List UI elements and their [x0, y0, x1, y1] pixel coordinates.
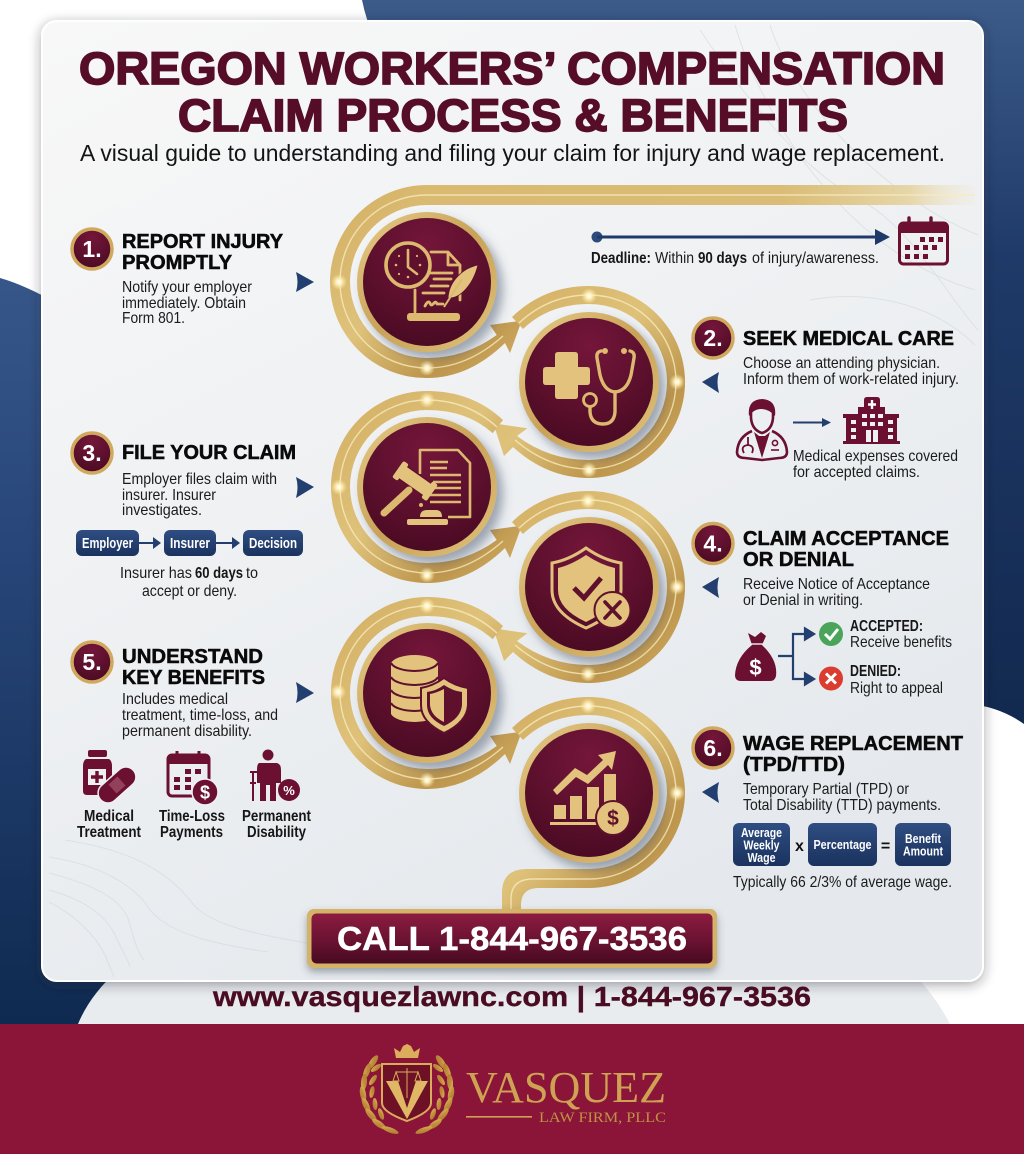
icon: permanent disability person: %: [283, 783, 295, 798]
60 day note: to: [246, 565, 258, 582]
badge 6: 6.: [703, 735, 723, 761]
icon: calendar deadline: [900, 218, 948, 264]
icon: accepted check: [819, 622, 843, 646]
logo wreath: [359, 1054, 455, 1136]
description 2: Choose an attending physician.: [743, 355, 940, 372]
60 day note: [120, 565, 258, 600]
decision branch arrows: [778, 628, 814, 684]
label: medical treatment: Medical: [84, 808, 134, 825]
badge 4: 4.: [703, 530, 723, 556]
arrow: doctor to hospital: [793, 418, 831, 427]
title: OREGON WORKERS’ COMPENSATION: [79, 43, 945, 94]
description 6: [743, 781, 941, 814]
heading 1: [122, 230, 283, 274]
description 3: Employer files claim with: [122, 471, 277, 488]
pointer arrow 1: [296, 272, 314, 292]
heading 2: SEEK MEDICAL CARE: [743, 327, 954, 350]
logo wordmark: VASQUEZ: [466, 1063, 666, 1112]
heading 1: PROMPTLY: [122, 251, 232, 274]
badge 3: 3.: [82, 440, 102, 466]
badge 4: [693, 524, 733, 564]
60 day note: accept or deny.: [142, 583, 237, 600]
accepted text: ACCEPTED:: [850, 618, 923, 635]
heading 5: [122, 645, 265, 689]
logo subline: LAW FIRM, PLLC: [539, 1110, 666, 1126]
step 5: understand key benefits: [72, 642, 278, 740]
box: average weekly wage: Average: [741, 825, 782, 840]
label: medical treatment: Treatment: [77, 824, 142, 841]
description 3: insurer. Insurer: [122, 487, 217, 504]
description 3: investigates.: [122, 502, 202, 519]
ribbon 3: loop and arrow: [331, 391, 522, 583]
medical expenses note: for accepted claims.: [793, 464, 920, 481]
pointer arrow 4: [702, 577, 719, 598]
medallion 5: coin stack and shield: [357, 623, 497, 763]
arrow: employer to insurer: [139, 537, 161, 549]
description 6: Temporary Partial (TPD) or: [743, 781, 910, 798]
icon: money bag: $: [749, 655, 762, 680]
typical rate note: Typically 66 2/3% of average wage.: [733, 874, 952, 891]
60 day note: Insurer has: [120, 565, 192, 582]
medallion 4: shield with check and x: [519, 517, 659, 657]
badge 5: 5.: [82, 649, 102, 675]
box: employer: [76, 530, 139, 556]
heading 6: (TPD/TTD): [743, 753, 845, 776]
box: insurer: [164, 530, 216, 556]
label: time-loss payments: Time-Loss: [159, 808, 225, 825]
heading 4: [743, 527, 949, 571]
main card: [42, 21, 983, 981]
box: average weekly wage: [733, 823, 790, 866]
heading 5: UNDERSTAND: [122, 645, 263, 668]
step 1: report injury: [72, 229, 283, 327]
gold ribbon path: [330, 185, 975, 913]
step 3: file your claim: [72, 433, 296, 519]
heading 4: OR DENIAL: [743, 548, 854, 571]
denied text: DENIED:: [850, 663, 901, 680]
description 5: Includes medical: [122, 691, 228, 708]
badge 2: 2.: [703, 325, 723, 351]
ribbon 6: loop leading to call button: [502, 697, 685, 913]
icon: medical treatment: [83, 750, 140, 807]
step 6: wage replacement: [693, 728, 963, 814]
heading 5: KEY BENEFITS: [122, 666, 265, 689]
description 4: [743, 576, 930, 609]
call to action button: [307, 909, 717, 968]
website and phone line: www.vasquezlawnc.com | 1-844-967-3536: [212, 981, 811, 1012]
description 5: permanent disability.: [122, 723, 252, 740]
medallion 2: medical cross and stethoscope: [519, 312, 659, 452]
box: benefit amount: Benefit: [905, 831, 942, 846]
description 5: [122, 691, 278, 740]
label: time-loss payments: Payments: [160, 824, 223, 841]
label: permanent disability: Permanent: [242, 808, 312, 825]
sparkles: [330, 274, 685, 801]
step 2: seek medical care: [693, 318, 959, 388]
call to action button: CALL 1-844-967-3536: [337, 920, 687, 957]
claim flow diagram: [76, 530, 303, 556]
wage formula: [733, 823, 951, 866]
equals sign: =: [881, 838, 890, 855]
title: CLAIM PROCESS & BENEFITS: [178, 90, 848, 141]
logo shield: [382, 1064, 431, 1121]
footer band: [0, 1024, 1024, 1154]
deadline timeline: [591, 229, 890, 267]
description 6: Total Disability (TTD) payments.: [743, 797, 941, 814]
heading 1: REPORT INJURY: [122, 230, 283, 253]
pointer arrow 5: [296, 682, 314, 703]
badge 5: [72, 642, 112, 682]
label: permanent disability: [242, 808, 312, 841]
medical expenses note: Medical expenses covered: [793, 448, 958, 465]
ribbon 4: loop and arrow: [493, 491, 685, 683]
description 4: Receive Notice of Acceptance: [743, 576, 930, 593]
accepted text: Receive benefits: [850, 634, 952, 651]
accepted text: [850, 618, 952, 651]
box: percentage: Percentage: [814, 837, 872, 852]
medallion 1: clock, document and quill: [357, 212, 497, 352]
medical expenses note: [793, 448, 958, 481]
description 3: [122, 471, 277, 519]
badge 6: [693, 728, 733, 768]
description 5: treatment, time-loss, and: [122, 707, 278, 724]
deadline timeline: 90 days: [698, 250, 747, 267]
heading 4: CLAIM ACCEPTANCE: [743, 527, 949, 550]
box: benefit amount: [895, 823, 951, 866]
medallion 6: rising bar chart and dollar coin: $: [607, 807, 619, 830]
description 2: [743, 355, 959, 388]
title: [79, 43, 945, 141]
heading 3: FILE YOUR CLAIM: [122, 441, 296, 464]
60 day note: 60 days: [195, 565, 243, 582]
denied text: [850, 663, 943, 697]
step 4: claim acceptance or denial: [693, 524, 949, 609]
label: medical treatment: [77, 808, 142, 841]
pointer arrow 2: [702, 372, 719, 393]
medallion 6: rising bar chart and dollar coin: [519, 723, 659, 863]
ribbon 1: top bar and arrow: [330, 185, 975, 378]
ribbon 2: loop and arrow: [493, 286, 685, 478]
icon: time-loss payments calendar: [168, 751, 218, 805]
description 2: Inform them of work-related injury.: [743, 371, 959, 388]
label: time-loss payments: [159, 808, 225, 841]
multiply sign: x: [795, 838, 804, 855]
box: average weekly wage: Wage: [748, 850, 776, 865]
pointer arrow 3: [296, 477, 314, 498]
box: employer: Employer: [82, 536, 133, 552]
box: average weekly wage: Weekly: [744, 838, 780, 852]
heading 6: [743, 732, 963, 776]
box: insurer: Insurer: [170, 536, 210, 552]
badge 1: 1.: [82, 236, 102, 262]
logo rule: [466, 1116, 532, 1118]
subtitle: A visual guide to understanding and filing your claim for injury and wage replacement.: [80, 140, 945, 166]
card texture lines: [49, 25, 978, 977]
badge 2: [693, 318, 733, 358]
arrow: insurer to decision: [216, 537, 240, 549]
medallion 3: gavel and document: [357, 417, 497, 557]
icon: money bag: [735, 632, 776, 681]
box: benefit amount: Amount: [903, 844, 944, 858]
deadline timeline: Deadline:: [591, 250, 651, 267]
icon: hospital: [843, 397, 900, 444]
description 1: [122, 279, 253, 327]
description 1: Form 801.: [122, 310, 185, 327]
label: permanent disability: Disability: [247, 824, 306, 841]
icon: doctor: [737, 399, 787, 460]
denied text: Right to appeal: [850, 680, 943, 697]
icon: denied cross: [819, 666, 843, 690]
icon: permanent disability person: [250, 750, 300, 801]
badge 3: [72, 433, 112, 473]
description 4: or Denial in writing.: [743, 592, 863, 609]
badge 1: [72, 229, 112, 269]
pointer arrow 6: [702, 782, 719, 803]
deadline timeline: Within: [655, 250, 694, 267]
heading 6: WAGE REPLACEMENT: [743, 732, 963, 755]
deadline timeline: of injury/awareness.: [752, 250, 879, 267]
logo crown: [394, 1044, 420, 1058]
description 1: immediately. Obtain: [122, 295, 246, 312]
box: percentage: [808, 823, 877, 866]
firm logo: [359, 1044, 666, 1136]
box: decision: Decision: [249, 536, 297, 552]
description 1: Notify your employer: [122, 279, 253, 296]
icon: time-loss payments calendar: $: [200, 782, 210, 802]
ribbon 5: loop and arrow: [331, 597, 522, 789]
box: decision: [243, 530, 303, 556]
